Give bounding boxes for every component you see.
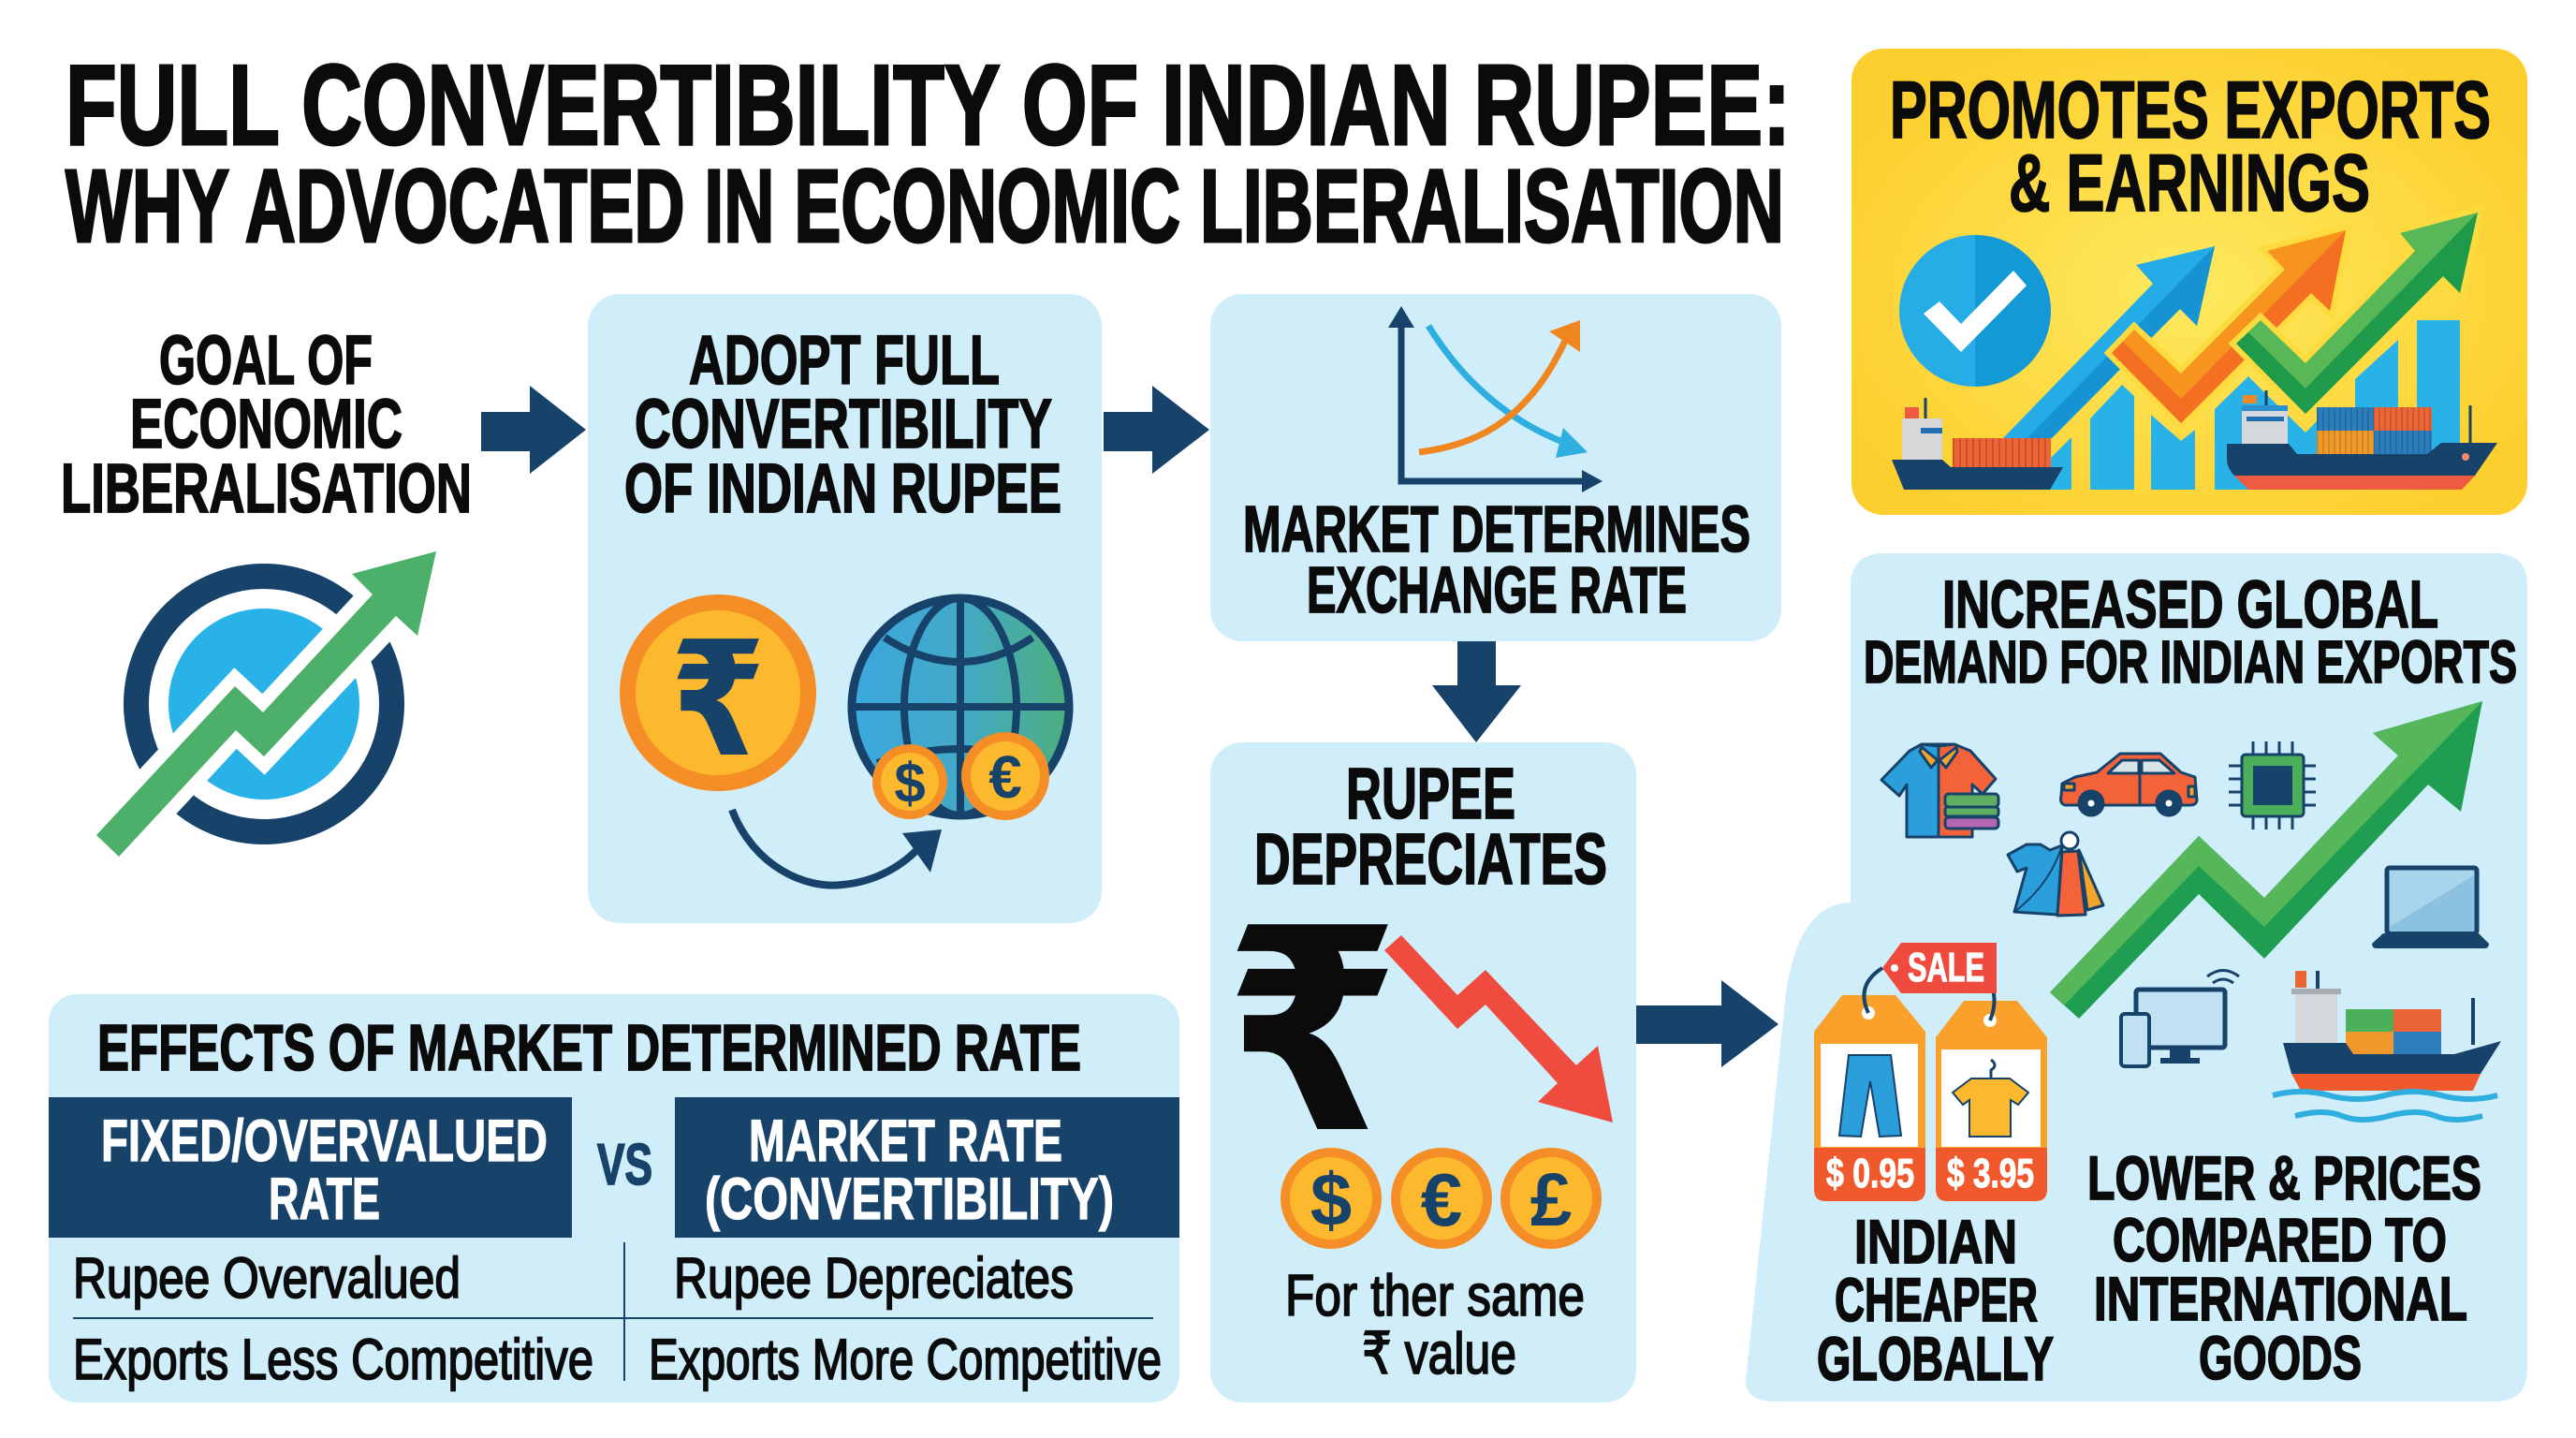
heading: adopt: ADOPT FULL — [689, 321, 1000, 399]
icon: globe with currency coins: € — [988, 743, 1022, 811]
title: FULL CONVERTIBILITY OF INDIAN RUPEE: — [66, 41, 1791, 169]
icon: falling red arrow — [1384, 935, 1613, 1123]
icon: car — [2061, 754, 2197, 815]
icon: shirt with folded clothes — [1881, 744, 1998, 837]
header: market rate convertibility: (CONVERTIBILITY) — [705, 1167, 1114, 1232]
text: for the same value: ₹ value — [1362, 1322, 1516, 1387]
table: comparison rows: Rupee Overvalued — [73, 1246, 461, 1310]
tag: sale label — [1882, 943, 1997, 993]
icon: large cargo ship — [2227, 390, 2497, 490]
text: market determines — [1243, 492, 1750, 626]
icon: small cargo ship — [1892, 398, 2063, 490]
text: lower prices compared — [2087, 1143, 2481, 1392]
text: lower prices compared: COMPARED TO — [2113, 1205, 2447, 1274]
heading: adopt — [624, 321, 1061, 527]
text: market determines: EXCHANGE RATE — [1307, 553, 1687, 626]
chart: supply and demand curves — [1388, 306, 1603, 492]
icon: rising blue arrow — [2003, 246, 2215, 438]
arrow: depreciates to demand — [1636, 980, 1778, 1067]
panel: promotes exports and earnings — [1852, 49, 2527, 515]
heading: goal of economic liberalisation: ECONOMIC — [130, 385, 402, 462]
heading: goal of economic liberalisation — [61, 321, 472, 527]
table: comparison rows: Rupee Depreciates — [674, 1246, 1074, 1310]
text: market determines: MARKET DETERMINES — [1243, 492, 1750, 565]
text: indian cheaper globally — [1817, 1207, 2054, 1393]
heading: rupee depreciates: RUPEE — [1346, 754, 1515, 834]
icon: rupee coin: ₹ — [670, 611, 766, 789]
chart: bars — [2050, 320, 2460, 490]
table: comparison rows: Exports Less Competitive — [73, 1328, 593, 1391]
icon: price tags with sale label — [1814, 943, 2047, 1201]
heading: effects: EFFECTS OF MARKET DETERMINED RATE — [97, 1011, 1081, 1084]
text: for the same value: For ther same — [1285, 1264, 1585, 1328]
icon: rising green arrow — [2236, 213, 2478, 414]
panel: rupee depreciates — [1210, 742, 1636, 1402]
heading: rupee depreciates — [1254, 754, 1607, 900]
arrow: goal to adopt — [481, 386, 586, 474]
title: WHY ADVOCATED IN ECONOMIC LIBERALISATION — [66, 149, 1784, 264]
tag: t-shirt price — [1936, 1001, 2047, 1201]
panel: increased global demand — [1746, 553, 2527, 1401]
icon: currency coins: $ — [1310, 1158, 1352, 1241]
heading: promotes exports — [1890, 66, 2491, 228]
icon: globe with currency coins — [852, 598, 1069, 820]
icon: microchip — [2229, 741, 2316, 829]
header: fixed overvalued rate: RATE — [269, 1167, 380, 1232]
icon: container ship on waves — [2273, 971, 2501, 1120]
icon: rising orange arrow — [2112, 230, 2346, 423]
icon: large rupee symbol: ₹ — [1224, 874, 1400, 1189]
tag: jeans price — [1814, 995, 1925, 1201]
icon: rupee coin — [620, 594, 816, 791]
title — [66, 41, 1791, 264]
heading: increased global demand — [1864, 568, 2517, 696]
heading: rupee depreciates: DEPRECIATES — [1254, 819, 1607, 900]
text: for the same value — [1285, 1264, 1585, 1387]
header: market rate convertibility — [675, 1097, 1179, 1238]
heading: goal of economic liberalisation: LIBERALISATION — [61, 449, 472, 527]
icon: currency coins — [1281, 1148, 1602, 1249]
icon: currency coins: £ — [1530, 1158, 1572, 1241]
heading: goal of economic liberalisation: GOAL OF — [159, 321, 373, 399]
header: fixed overvalued rate — [49, 1097, 572, 1238]
arrow: market to depreciates — [1432, 641, 1521, 742]
icon: t-shirt and shopping bags — [2008, 832, 2103, 916]
icon: currency coins: € — [1421, 1158, 1462, 1241]
label: vs: VS — [597, 1133, 652, 1197]
table: comparison rows: Exports More Competitive — [649, 1328, 1162, 1391]
tag: jeans price: $ 0.95 — [1826, 1151, 1914, 1196]
panel: adopt full convertibility — [588, 294, 1102, 923]
text: indian cheaper globally: CHEAPER — [1835, 1265, 2038, 1334]
heading: adopt: OF INDIAN RUPEE — [624, 449, 1061, 527]
header: market rate convertibility: MARKET RATE — [749, 1108, 1062, 1174]
icon: large green rising arrow — [2050, 701, 2482, 1019]
panel: market determines exchange rate — [1210, 294, 1781, 641]
tag: t-shirt price: $ 3.95 — [1947, 1151, 2034, 1196]
icon: devices with wifi — [2121, 970, 2239, 1066]
icon: growth arrow over circle — [96, 551, 436, 857]
icon: laptop — [2372, 868, 2489, 948]
heading: adopt: CONVERTIBILITY — [635, 385, 1052, 462]
text: lower prices compared: GOODS — [2199, 1323, 2362, 1392]
icon: check badge — [1899, 235, 2051, 387]
text: indian cheaper globally: INDIAN — [1854, 1207, 2017, 1276]
arrow: adopt to market — [1104, 386, 1209, 474]
tag: sale label: SALE — [1908, 945, 1984, 990]
panel: effects of market determined rate — [49, 994, 1179, 1402]
icon: globe with currency coins: $ — [894, 752, 926, 814]
arrow: curved to globe — [732, 810, 942, 886]
table: comparison rows — [73, 1246, 1162, 1391]
heading: promotes exports: & EARNINGS — [2009, 139, 2370, 228]
text: indian cheaper globally: GLOBALLY — [1817, 1324, 2054, 1393]
header: fixed overvalued rate: FIXED/OVERVALUED — [101, 1108, 548, 1174]
